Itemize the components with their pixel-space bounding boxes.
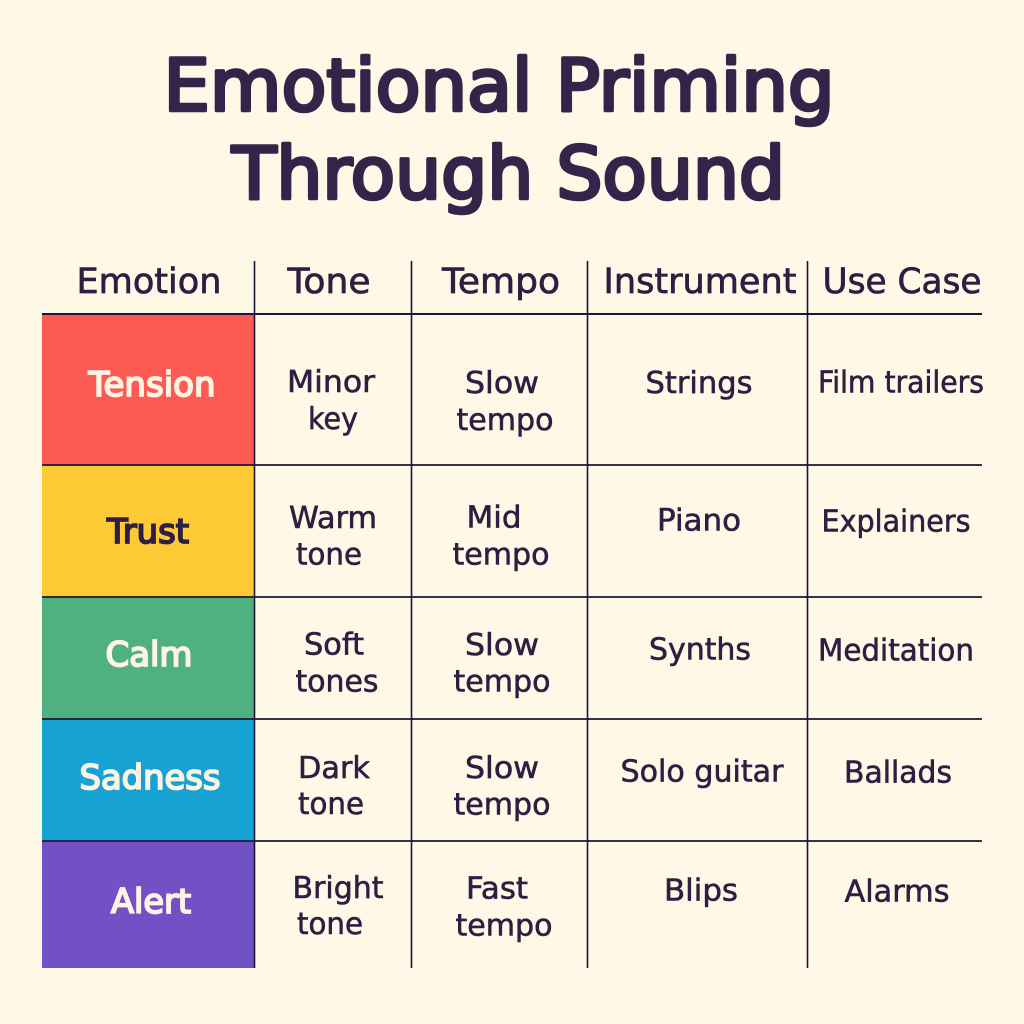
- row: Sadness: tempo: [454, 788, 550, 822]
- row: Trust: Piano: [657, 504, 741, 538]
- row: Alert: tone: [297, 907, 363, 942]
- row: Tension: key: [308, 402, 358, 437]
- row: Tension: Strings: [646, 366, 752, 401]
- title: [164, 44, 834, 216]
- row: Tension: Film trailers: [818, 366, 984, 400]
- table header row: Instrument: [604, 262, 796, 302]
- row: Sadness: Dark: [298, 751, 371, 786]
- row: Alert: Alert: [111, 882, 191, 922]
- row: Tension: Tension: [87, 365, 216, 405]
- row: Alert: [42, 841, 950, 968]
- row: Trust: Warm: [289, 501, 377, 536]
- row: Tension: Minor: [287, 365, 376, 400]
- row: Calm: tones: [296, 664, 378, 700]
- row: Trust: [42, 465, 970, 597]
- row: Calm: Slow: [465, 628, 539, 663]
- row: Sadness: Ballads: [844, 756, 952, 790]
- table header row: [76, 262, 982, 302]
- row: Calm: Soft: [304, 628, 364, 662]
- row: Calm: Calm: [106, 635, 192, 675]
- row: Alert: Fast: [466, 872, 528, 906]
- row: Tension: tempo: [456, 403, 554, 438]
- row: Calm: tempo: [454, 664, 550, 700]
- row: Trust: tempo: [452, 538, 550, 572]
- row: Alert: tempo: [456, 908, 552, 944]
- row: Alert: Blips: [664, 874, 738, 908]
- table header row: Use Case: [822, 262, 982, 302]
- row: Sadness: [42, 719, 952, 841]
- row: Sadness: Sadness: [80, 758, 220, 798]
- row: Tension: [42, 315, 984, 465]
- row: Alert: Alarms: [844, 874, 950, 910]
- row: Trust: Trust: [106, 512, 189, 552]
- table header row: Emotion: [76, 262, 222, 302]
- row: Sadness: tone: [298, 787, 364, 822]
- row: Trust: Mid: [466, 500, 522, 536]
- row: Alert: Bright: [292, 871, 384, 906]
- row: Calm: Synths: [649, 632, 751, 668]
- row: Tension: Slow: [465, 366, 539, 401]
- table header row: Tone: [286, 262, 370, 302]
- title: Through Sound: [231, 132, 785, 216]
- row: Sadness: Solo guitar: [620, 754, 784, 790]
- table header row: Tempo: [441, 262, 560, 302]
- row: Trust: Explainers: [822, 504, 970, 540]
- row: Sadness: Slow: [465, 751, 539, 786]
- row: Trust: tone: [296, 538, 362, 572]
- title: Emotional Priming: [164, 44, 834, 128]
- row: Calm: [42, 597, 974, 719]
- row: Calm: Meditation: [818, 634, 974, 668]
